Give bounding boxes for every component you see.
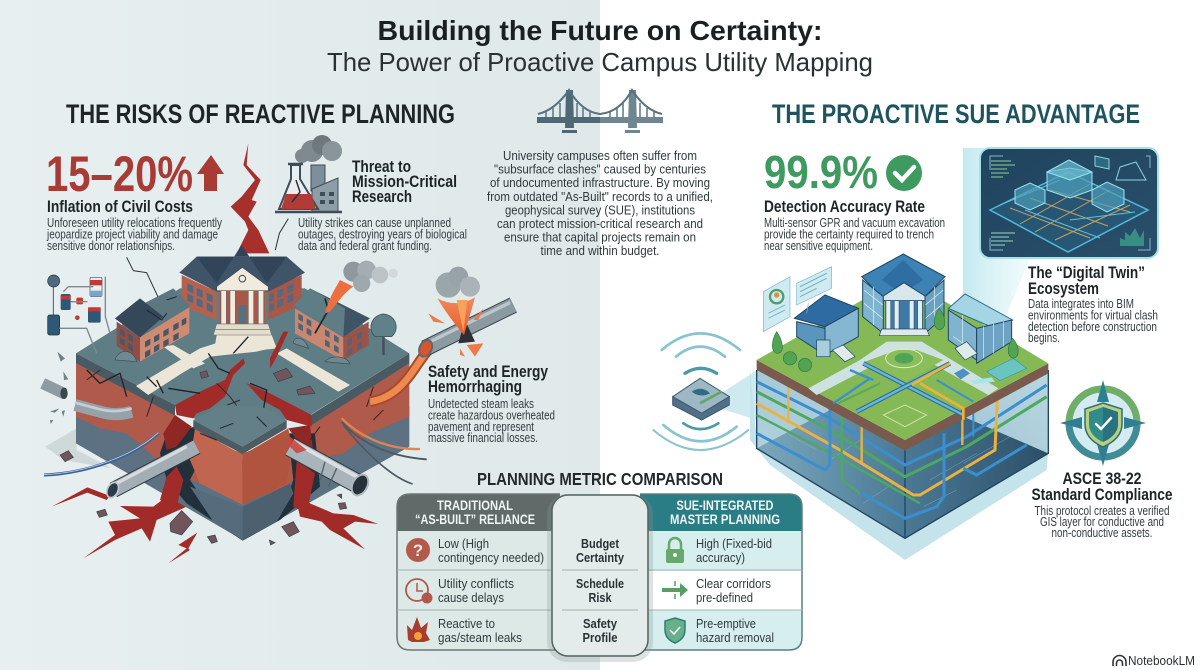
column: traditional: TRADITIONAL [437,498,513,513]
block: threat to mission-critical research: Mission-Critical [352,172,457,191]
block: digital twin ecosystem: environments for virtual clash [1028,308,1158,322]
left building [794,295,858,362]
right building [948,294,1013,363]
icon: broken tanks [48,275,110,353]
title: Building the Future on Certainty: [378,15,822,46]
column: SUE-integrated: SUE-INTEGRATED [676,498,774,513]
surface pipes [833,363,973,420]
block: threat to mission-critical research: Research [352,187,412,206]
icon: clear path arrow [662,581,688,599]
block: detection accuracy rate: provide the certainty required to trench [764,228,934,242]
block: ASCE 38-22 compliance: ASCE 38-22 [1062,469,1142,488]
icon: lock [666,538,684,563]
title [327,15,873,77]
title: The Power of Proactive Campus Utility Mapping [327,47,873,77]
column: traditional: Utility conflicts [438,576,514,591]
block: ASCE 38-22 compliance: non-conductive assets. [1052,526,1152,540]
column: SUE-integrated [640,494,802,650]
crack rising behind building [231,143,269,253]
block: ASCE 38-22 compliance: GIS layer for conductive and [1040,515,1164,529]
outward ground cracks [52,487,187,558]
smoke plume [325,261,398,313]
column: metric labels: Profile [582,630,618,645]
debris shards [50,352,68,424]
rocks [60,368,347,545]
block: inflation of civil costs: Inflation of Civil Costs [47,197,193,216]
soil strip [757,360,1048,451]
block: digital twin ecosystem [1028,263,1158,345]
shrubs and debris [115,338,350,364]
stat: 15-20%: 15–20% [46,146,193,202]
icon: cracked lab flask and factory [275,135,342,212]
block: threat to mission-critical research [298,157,467,253]
cable: blue [44,433,158,475]
column: SUE-integrated: pre-defined [696,590,753,605]
panel: digital twin screen [980,148,1158,258]
visible floor [757,410,1048,538]
column: metric labels: Certainty [576,550,625,565]
intro text: University campuses often suffer from [503,148,697,163]
block: threat to mission-critical research: Utility strikes can cause unplanned [298,216,451,230]
block: ASCE 38-22 compliance [1032,469,1172,540]
panel: comparison table [397,494,802,662]
block: threat to mission-critical research: Threat to [352,157,411,176]
icon: safety shield [665,618,685,643]
intro text: of undocumented infrastructure. By moving [490,175,710,190]
column: traditional: contingency needed) [438,550,544,565]
central pillar [190,428,243,505]
comparison heading: PLANNING METRIC COMPARISON [477,469,723,489]
twin: wireframe ground [990,172,1148,252]
block: digital twin ecosystem: Ecosystem [1028,279,1099,298]
soil block [76,407,409,540]
stat: 99.9%: 99.9% [764,146,878,198]
pipe: front left [113,447,197,490]
block: digital twin ecosystem: Data integrates into BIM [1028,297,1134,311]
column: SUE-integrated: MASTER PLANNING [670,512,780,527]
block: safety and energy hemorrhaging: pavement and represent [428,420,534,434]
sensor beam [717,370,757,420]
icon: check circle [886,155,922,191]
block: ASCE 38-22 compliance: This protocol creates a verified [1034,504,1170,518]
column: SUE-integrated: Pre-emptive [696,616,756,631]
column: traditional: gas/steam leaks [438,630,522,645]
column: metric labels: Safety [583,616,618,631]
block: detection accuracy rate [764,197,945,253]
campus: right hall [293,288,370,361]
icon: bridge [537,90,663,133]
central fracture [160,427,320,541]
underground pipes [757,382,1047,518]
block: safety and energy hemorrhaging: massive financial losses. [428,431,538,445]
pipe: broken stub [43,383,65,394]
icon: question mark [406,538,430,562]
block: inflation of civil costs: sensitive donor relationships. [47,239,175,253]
column: SUE-integrated: accuracy) [696,550,745,565]
glass faces [757,370,905,538]
pipe: orange steam line [370,350,428,402]
cream paths [136,333,350,395]
surface equipment [954,368,970,379]
column: metric labels [547,494,653,662]
cables: right [342,418,420,449]
block: detection accuracy rate: Detection Accuracy Rate [764,197,925,216]
block: detection accuracy rate: near sensitive equipment. [764,239,873,253]
block: detection accuracy rate: Multi-sensor GPR and vacuum excavation [764,216,945,230]
intro text: ensure that capital projects remain on [504,230,696,244]
notebooklm mark: NotebookLM [1128,653,1195,668]
block: inflation of civil costs: jeopardize project viability and damage [46,228,218,242]
intro text: geophysical survey (SUE), institutions [505,202,695,218]
grass top [757,277,1048,440]
column: traditional: Reactive to [438,616,495,631]
block: digital twin ecosystem: detection before construction [1028,320,1157,334]
column: metric labels: Budget [581,536,620,551]
column: metric labels: Schedule [576,576,624,591]
intro text: can protect mission-critical research and [497,216,703,231]
block: threat to mission-critical research: outages, destroying years of biological [298,228,467,242]
beam to digital twin [963,148,1030,350]
icon: compass shield badge [1060,380,1146,466]
illustration: campus buildings and sensor [653,254,1018,450]
floor reflection [750,370,1048,560]
pipe: burst pipe with flame [425,305,513,348]
intro text [487,148,713,258]
top surface [76,288,409,420]
column: traditional: cause delays [438,590,504,605]
column: metric labels: Risk [588,590,612,605]
pipe: front right [290,447,360,485]
block: digital twin ecosystem: begins. [1028,331,1060,345]
floating data cards [763,267,832,332]
icon: flame burst [407,617,430,642]
column: traditional: “AS-BUILT” RELIANCE [415,512,535,527]
intro text: from outdated "As-Built" records to a unified, [487,189,713,204]
trees [772,308,1018,372]
block: threat to mission-critical research: data and federal grant funding. [298,239,432,253]
plaza paths [808,342,998,395]
icon: clock [406,579,432,604]
block: inflation of civil costs: Unforeseen utility relocations frequently [47,216,223,230]
intro text: time and within budget. [540,243,660,258]
ground shadow [45,428,112,468]
tree [371,314,396,355]
column: SUE-integrated: Clear corridors [696,576,771,591]
illustration: fractured campus [43,143,513,563]
icon: up arrow [197,155,224,191]
icon: GPR sensor with signal waves [653,333,748,450]
block: safety and energy hemorrhaging: Undetected steam leaks [428,397,534,411]
block: inflation of civil costs [46,197,223,253]
illustration: glass cross-section block [750,277,1048,560]
block: safety and energy hemorrhaging: Safety and Energy [428,362,548,381]
column: SUE-integrated: hazard removal [696,630,774,645]
red crevasses [175,332,312,427]
pipe: left elbow [75,405,132,414]
icon: question mark: ? [413,541,423,560]
twin: wireframe buildings [1047,168,1092,198]
campus: main hall [179,245,305,335]
block: safety and energy hemorrhaging [428,362,555,445]
block: safety and energy hemorrhaging: Hemorrhaging [428,377,522,396]
column: traditional: Low (High [438,536,489,551]
intro text: "subsurface clashes" caused by centuries [494,162,706,176]
heading: risks of reactive planning: THE RISKS OF REACTIVE PLANNING [66,99,455,129]
center building [862,254,945,336]
campus: left hall [115,288,191,362]
column: SUE-integrated: High (Fixed-bid [696,536,772,551]
block: digital twin ecosystem: The “Digital Twin” [1028,263,1145,282]
column: traditional [397,494,560,650]
block: safety and energy hemorrhaging: create hazardous overheated [428,408,555,422]
